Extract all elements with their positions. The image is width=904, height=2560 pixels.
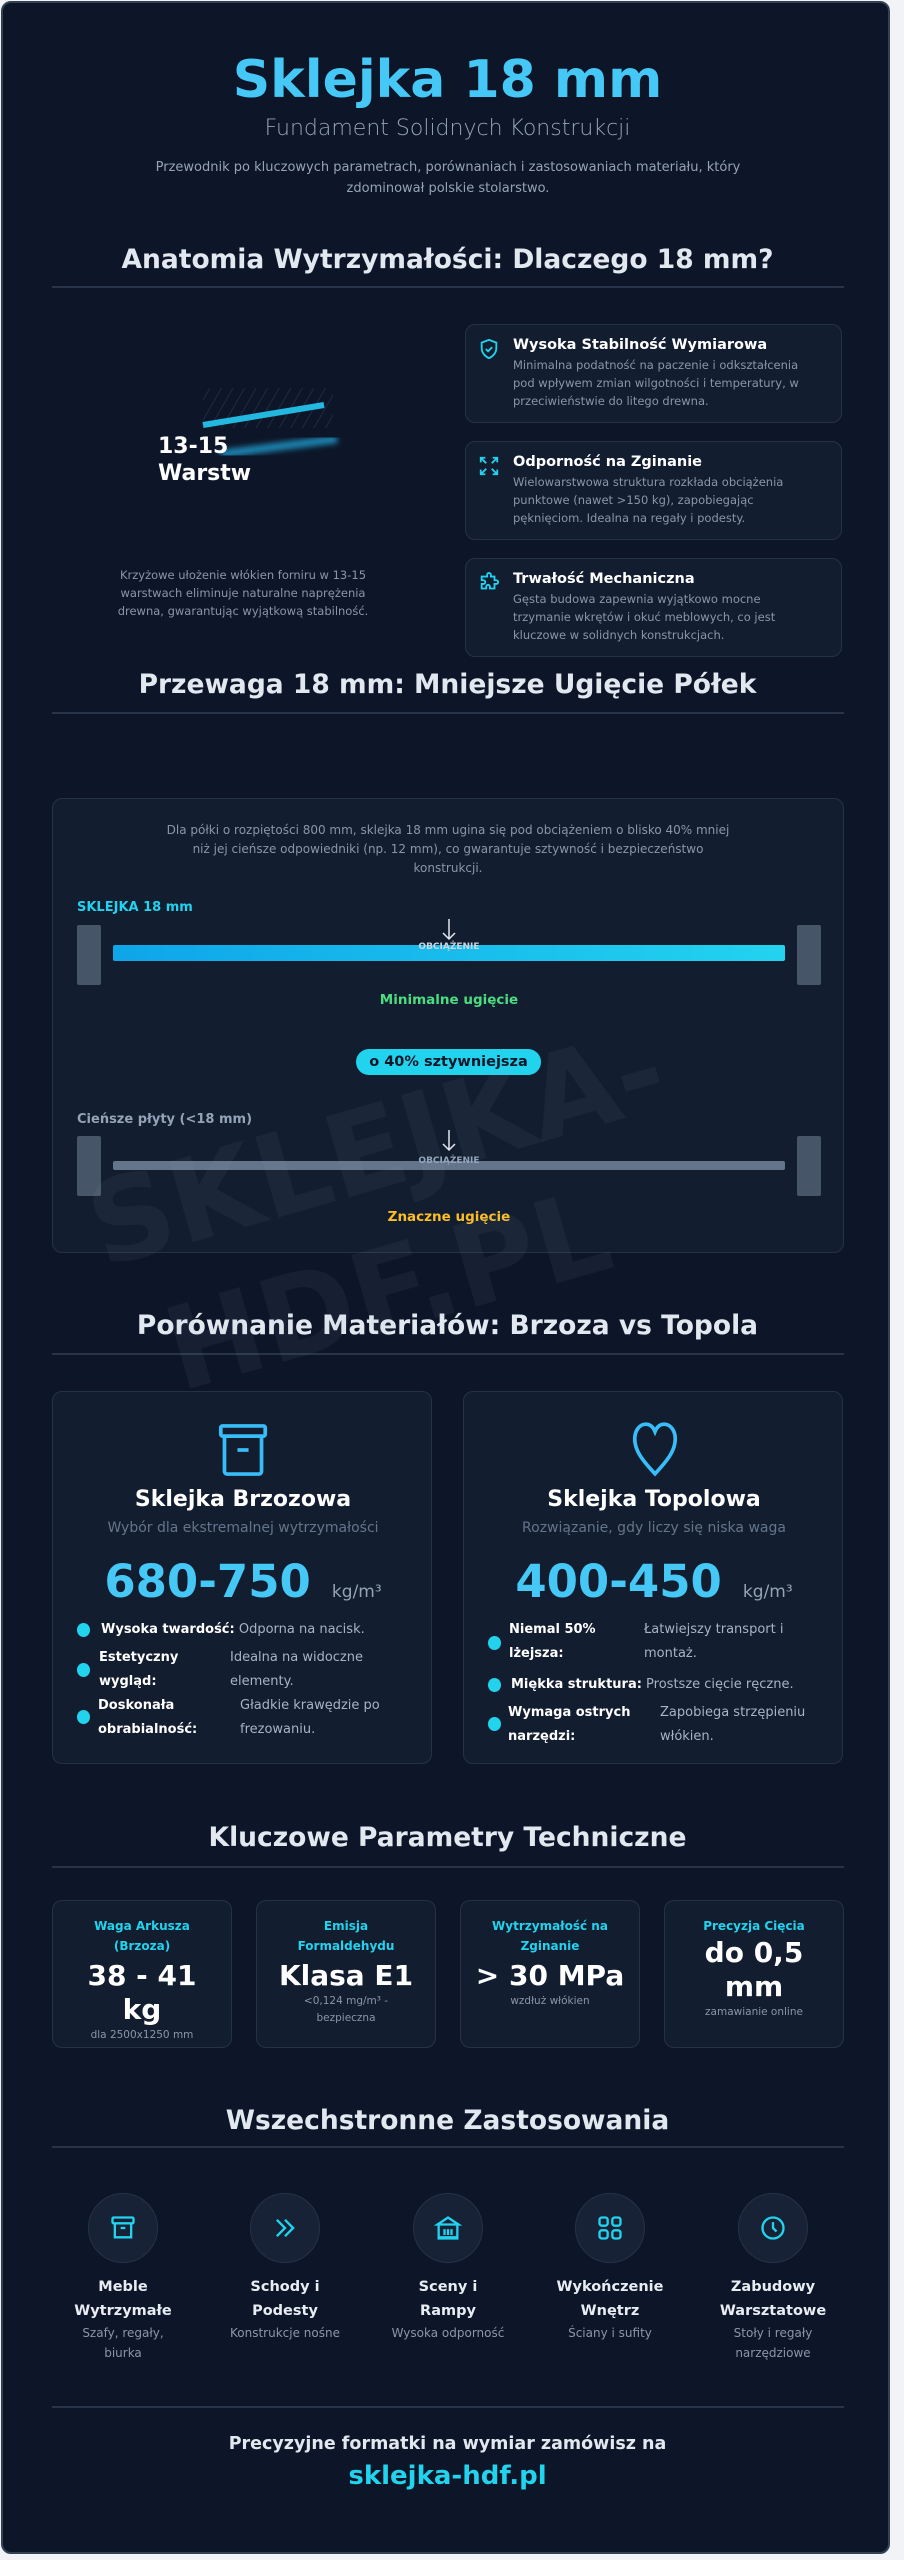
feature card: bending (465, 441, 842, 540)
pill: 40% (356, 1049, 541, 1075)
panel: poplar (463, 1391, 843, 1764)
app: stages: Wysoka odporność (392, 2326, 504, 2340)
app: stages: Sceny i Rampy (419, 2279, 477, 2319)
heading: anatomy: Anatomia Wytrzymałości: Dlaczego 18 mm? (122, 244, 773, 275)
heading: applications: Wszechstronne Zastosowania (226, 2105, 669, 2136)
app: furniture: Szafy, regały, biurka (82, 2326, 164, 2360)
feature card: stability (465, 324, 842, 423)
panel: birch: Wysoka twardość: Odporna na nacisk. (101, 1622, 365, 1637)
stat: weight: 38 - 41 kg (87, 1959, 197, 2026)
heading: comparison: Porównanie Materiałów: Brzoza vs Topola (137, 1310, 758, 1341)
icon: box (218, 1424, 268, 1476)
feature card: stability: Minimalna podatność na paczenie i odkształcenia pod wpływem zmian wilgotności i temperatury, w przeciwieństwie do litego drewna. (513, 358, 799, 408)
layers graphic (158, 388, 341, 486)
panel: poplar: Wymaga ostrych narzędzi: (508, 1705, 630, 1744)
beam: 18mm (77, 919, 821, 985)
stat: strength: > 30 MPa (476, 1959, 624, 1992)
pill: 40%: o 40% sztywniejsza (369, 1054, 528, 1070)
label: minimal: Minimalne ugięcie (380, 992, 518, 1008)
feature card: bending: Odporność na Zginanie (513, 454, 702, 470)
panel: birch: Sklejka Brzozowa (135, 1487, 351, 1512)
stat: strength (460, 1900, 640, 2048)
feature card: stability: Wysoka Stabilność Wymiarowa (513, 337, 767, 353)
stat: strength: Wytrzymałość na Zginanie (492, 1919, 608, 1953)
panel: deflection (52, 798, 844, 1253)
app: furniture: Meble Wytrzymałe (74, 2279, 172, 2319)
app: stairs (230, 2193, 340, 2340)
stat: emission (256, 1900, 436, 2048)
panel: birch: Idealna na widoczne elementy. (230, 1650, 363, 1689)
panel: poplar: Niemal 50% lżejsza: (509, 1622, 596, 1661)
deflection text: Dla półki o rozpiętości 800 mm, sklejka 18 mm ugina się pod obciążeniem o blisko 40% mniej niż jej cieńsze odpowiedniki (np. 12 mm), co gwarantuje sztywność i bezpieczeństwo konstrukcji. (167, 823, 729, 875)
layers label (158, 434, 251, 486)
icon: heart (632, 1422, 678, 1476)
app: stairs: Konstrukcje nośne (230, 2326, 340, 2340)
panel: poplar: Rozwiązanie, gdy liczy się niska waga (522, 1520, 786, 1536)
stat: precision: do 0,5 mm (705, 1936, 803, 2003)
heading: deflection: Przewaga 18 mm: Mniejsze Ugięcie Półek (139, 669, 756, 700)
label: 18mm: SKLEJKA 18 mm (77, 900, 193, 915)
stat: weight: dla 2500x1250 mm (91, 2029, 193, 2041)
stat: emission: Emisja Formaldehydu (298, 1919, 394, 1953)
watermark: HDF.PL (151, 1164, 625, 1418)
layers label: 13-15 (158, 434, 228, 459)
app: workshop (720, 2193, 826, 2360)
stat: weight (52, 1900, 232, 2048)
stat: emission: Klasa E1 (279, 1959, 413, 1992)
watermark: SKLEJKA- (74, 1003, 680, 1295)
app: stages (392, 2193, 504, 2340)
layers label: Warstw (158, 461, 251, 486)
stat: strength: wzdłuż włókien (510, 1995, 590, 2007)
beam: thinner (77, 1130, 821, 1196)
panel: poplar: Łatwiejszy transport i montaż. (644, 1622, 783, 1661)
beam: 18mm: OBCIĄŻENIE (418, 942, 480, 952)
panel: poplar: Miękka struktura: Prostsze cięcie ręczne. (511, 1677, 794, 1692)
title: Sklejka 18 mm (233, 50, 662, 110)
panel: poplar: Zapobiega strzępieniu włókien. (660, 1705, 805, 1744)
footer text: Precyzyjne formatki na wymiar zamówisz na (229, 2434, 666, 2454)
app: interiors: Ściany i sufity (568, 2326, 652, 2340)
stat: weight: Waga Arkusza (Brzoza) (94, 1919, 190, 1953)
footer link: sklejka-hdf.pl (348, 2461, 547, 2491)
label: significant: Znaczne ugięcie (388, 1209, 510, 1225)
panel: birch: Estetyczny wygląd: (99, 1650, 178, 1689)
panel: birch: Wybór dla ekstremalnej wytrzymałości (107, 1520, 379, 1536)
stat: precision: zamawianie online (705, 2006, 803, 2018)
icon: shield (480, 338, 498, 360)
feature card: durability: Gęsta budowa zapewnia wyjątkowo mocne trzymanie wkrętów i okuć meblowych, co jest kluczowe w solidnych konstrukcjach. (513, 592, 775, 642)
feature card: durability (465, 558, 842, 657)
panel: poplar: 400-450 kg/m³ (515, 1555, 793, 1608)
app: furniture (74, 2193, 172, 2360)
app: interiors (556, 2193, 663, 2340)
stat: precision: Precyzja Cięcia (703, 1919, 805, 1933)
panel: birch: Doskonała obrabialność: (98, 1698, 197, 1737)
stat: emission: <0,124 mg/m³ - bezpieczna (304, 1995, 388, 2024)
stat: precision (664, 1900, 844, 2048)
panel: birch: 680-750 kg/m³ (104, 1555, 382, 1608)
layers caption: Krzyżowe ułożenie włókien forniru w 13-15 warstwach eliminuje naturalne naprężenia drewna, gwarantując wyjątkową stabilność. (118, 568, 368, 618)
feature card: bending: Wielowarstwowa struktura rozkłada obciążenia punktowe (nawet >150 kg), zapobiegając pęknięciom. Idealna na regały i podesty. (513, 475, 783, 525)
app: stairs: Schody i Podesty (250, 2279, 320, 2319)
label: thinner: Cieńsze płyty (<18 mm) (77, 1112, 252, 1127)
panel: birch: Gładkie krawędzie po frezowaniu. (240, 1698, 380, 1737)
app: interiors: Wykończenie Wnętrz (556, 2279, 663, 2319)
intro text: Przewodnik po kluczowych parametrach, porównaniach i zastosowaniach materiału, który zdominował polskie stolarstwo. (156, 160, 740, 196)
app: workshop: Stoły i regały narzędziowe (734, 2326, 812, 2360)
subtitle: Fundament Solidnych Konstrukcji (265, 116, 630, 141)
beam: thinner: OBCIĄŻENIE (418, 1156, 480, 1166)
panel: poplar: Sklejka Topolowa (547, 1487, 761, 1512)
app: workshop: Zabudowy Warsztatowe (720, 2279, 826, 2319)
heading: parameters: Kluczowe Parametry Techniczne (209, 1822, 686, 1853)
panel: birch (52, 1391, 432, 1764)
icon: puzzle (480, 572, 500, 590)
feature card: durability: Trwałość Mechaniczna (513, 571, 695, 587)
icon: expand (480, 456, 498, 476)
